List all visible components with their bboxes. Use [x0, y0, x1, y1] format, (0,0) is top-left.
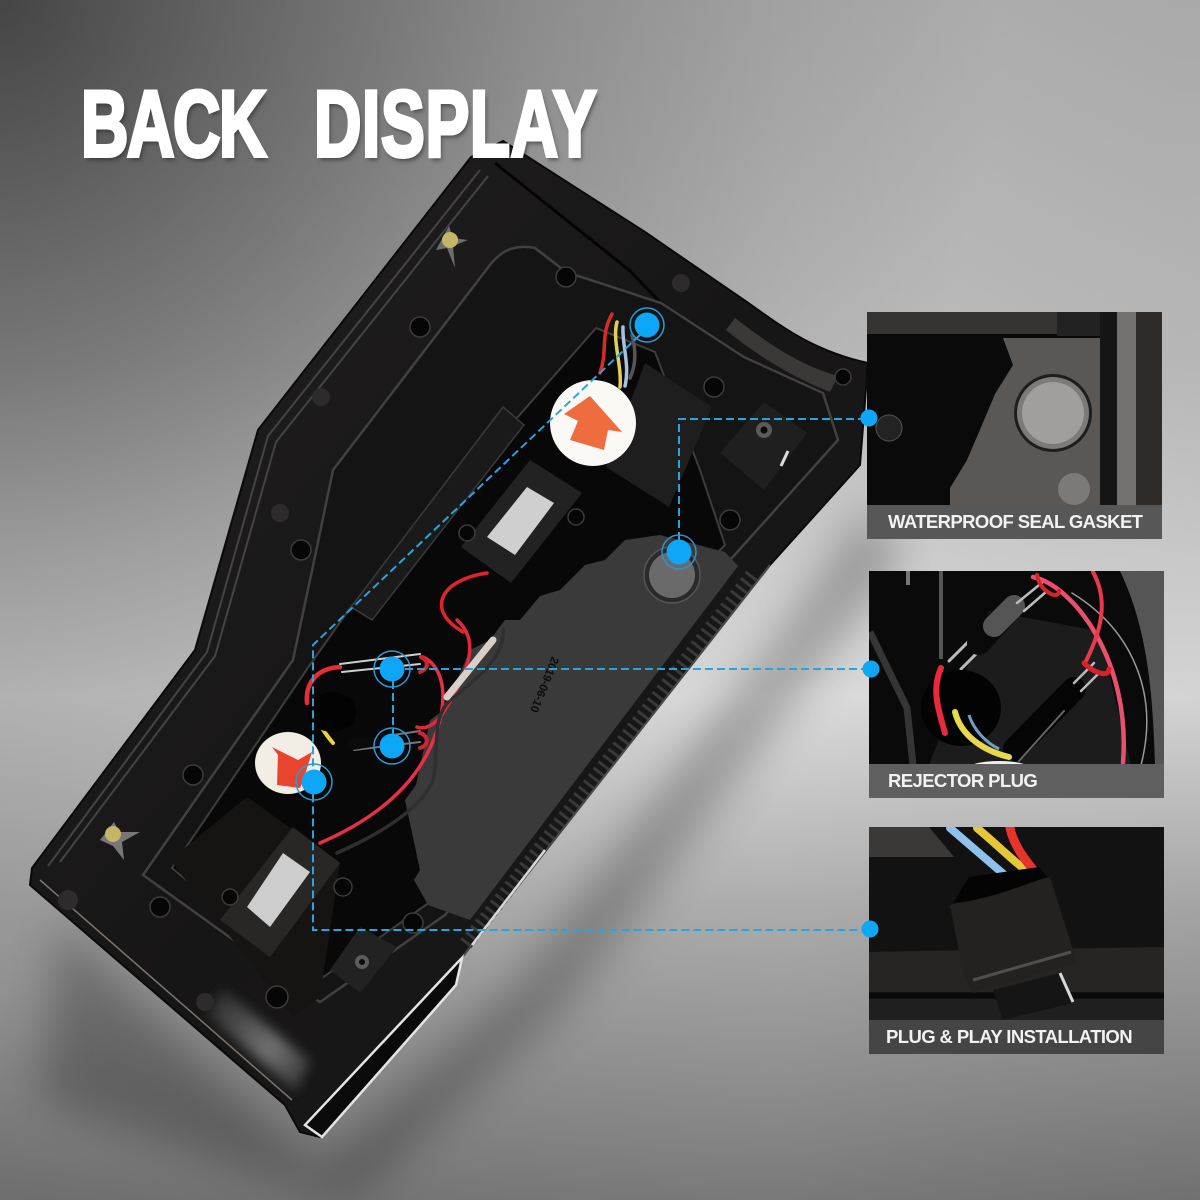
ribbed side rim [465, 575, 752, 945]
callout dots on product [296, 308, 696, 800]
chrome strip [305, 958, 462, 1137]
flange rim lines [48, 170, 488, 866]
caption: REJECTOR PLUG [888, 770, 1037, 791]
caption: WATERPROOF SEAL GASKET [888, 511, 1142, 532]
panel: rejector plug [869, 571, 1164, 798]
shiny corner band [208, 988, 310, 1092]
wires [307, 314, 635, 853]
title: BACK DISPLAY [81, 71, 597, 176]
flat marks [58, 274, 690, 1011]
arrow sticker bottom [255, 732, 321, 794]
gasket disc [644, 547, 700, 603]
upper module [461, 460, 582, 583]
screws [150, 267, 851, 1008]
arrow sticker top [550, 380, 636, 466]
caption: PLUG & PLAY INSTALLATION [886, 1026, 1132, 1047]
deep tray [172, 328, 725, 985]
panel: plug and play installation [869, 827, 1164, 1054]
housing [30, 141, 868, 1137]
lower module [170, 797, 340, 1017]
panel: waterproof seal gasket [867, 312, 1162, 539]
caption [869, 1020, 1164, 1054]
textured raised panel [405, 535, 738, 920]
resin blob [308, 692, 356, 732]
callout lines [313, 335, 870, 930]
studs [100, 226, 468, 860]
caption [869, 764, 1164, 798]
socket blocks [330, 402, 807, 993]
curved highlight [726, 318, 838, 392]
caption [867, 505, 1162, 539]
date stamp: 2019-06-10 [527, 655, 560, 714]
large connector housing [606, 363, 712, 507]
inner raised tray [143, 247, 838, 1002]
